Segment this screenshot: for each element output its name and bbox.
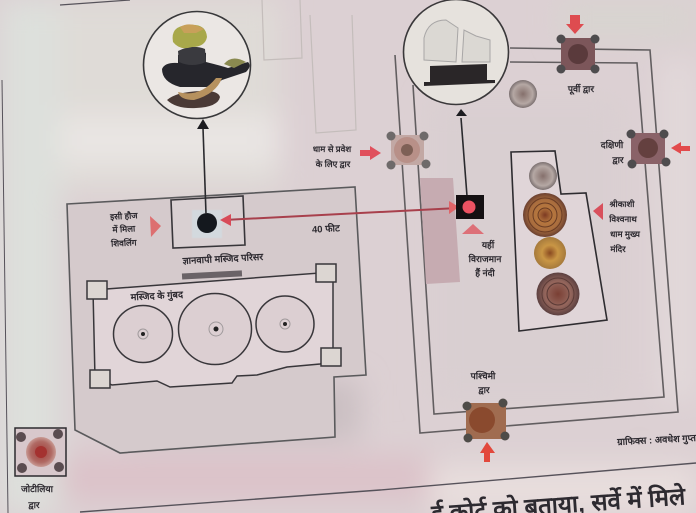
pointer: shivling	[150, 216, 161, 237]
mosque corner towers	[87, 264, 341, 388]
label: shivling found here	[109, 210, 139, 249]
label: west gate: पश्चिमी	[470, 370, 496, 381]
label: Shri Kashi Vishwanath Dham main temple: श्रीकाशी	[609, 199, 635, 209]
panel: mosque compound plan	[67, 187, 366, 453]
photo: Nandi statue	[404, 0, 508, 104]
label: Nandi sits here	[468, 239, 502, 278]
arrow: east gate	[566, 15, 584, 34]
label: 40 feet: 40 फीट	[312, 222, 341, 236]
label: shivling found here: में मिला	[111, 223, 136, 235]
label: Nandi sits here: यहीं	[481, 239, 495, 250]
label: south gate	[600, 139, 624, 165]
label: Nandi sits here: हैं नंदी	[474, 267, 495, 278]
label: domes of the mosque: मस्जिद के गुंबद	[129, 289, 184, 303]
label: Shri Kashi Vishwanath Dham main temple	[608, 199, 641, 254]
marker: shivling in tank	[197, 213, 217, 233]
gate: west	[462, 398, 510, 442]
label: Jotiliya gate	[20, 483, 54, 510]
label: shivling found here: शिवलिंग	[110, 237, 138, 249]
gate: south	[626, 130, 670, 168]
label: Jotiliya gate: जोटीलिया	[20, 483, 54, 494]
label: gate for entry from Dham: के लिए द्वार	[315, 159, 351, 169]
label: gate for entry from Dham: धाम से प्रवेश	[313, 144, 352, 154]
panel: main temple outline	[511, 151, 607, 331]
gate: east	[556, 34, 600, 74]
label strip under heading	[182, 270, 242, 280]
wazu tank box	[171, 196, 245, 248]
photo: shivling	[144, 12, 250, 118]
panel: temple enclosure walls	[395, 48, 678, 433]
label: Nandi sits here: विराजमान	[468, 253, 502, 264]
label: gate for entry from Dham	[313, 144, 352, 169]
label: shivling found here: इसी हौज	[109, 210, 139, 222]
label: Gyanvapi mosque complex: ज्ञानवापी मस्जिद परिसर	[181, 251, 265, 267]
label: south gate: द्वार	[611, 155, 624, 165]
distance arrow: shivling to Nandi	[220, 201, 459, 226]
gate: entry from Dham	[386, 132, 430, 170]
label: Shri Kashi Vishwanath Dham main temple: विश्वनाथ	[608, 214, 637, 224]
pointer: main temple label	[593, 203, 603, 220]
label: south gate: दक्षिणी	[600, 139, 624, 150]
arrow: Dham gate	[360, 146, 381, 160]
gate: Jotiliya	[15, 428, 66, 476]
hatched block	[420, 178, 460, 284]
label: Shri Kashi Vishwanath Dham main temple: धाम मुख्य	[610, 229, 641, 240]
mosque building outline	[93, 272, 333, 387]
marker: Nandi	[456, 195, 484, 219]
label: east gate: पूर्वी द्वार	[567, 83, 594, 95]
dome centres	[141, 322, 287, 336]
label: west gate	[470, 370, 496, 395]
label: Shri Kashi Vishwanath Dham main temple: मंदिर	[609, 244, 626, 254]
arrow: south gate	[671, 142, 690, 154]
label: Jotiliya gate: द्वार	[27, 500, 40, 510]
arrow: tank to shivling photo	[197, 119, 209, 214]
temple domes	[509, 80, 580, 316]
mosque domes	[114, 294, 314, 364]
arrow: Nandi marker to photo	[456, 109, 467, 196]
arrow: west gate	[480, 442, 495, 462]
label: west gate: द्वार	[477, 385, 490, 395]
pointer: Nandi label	[462, 224, 484, 234]
